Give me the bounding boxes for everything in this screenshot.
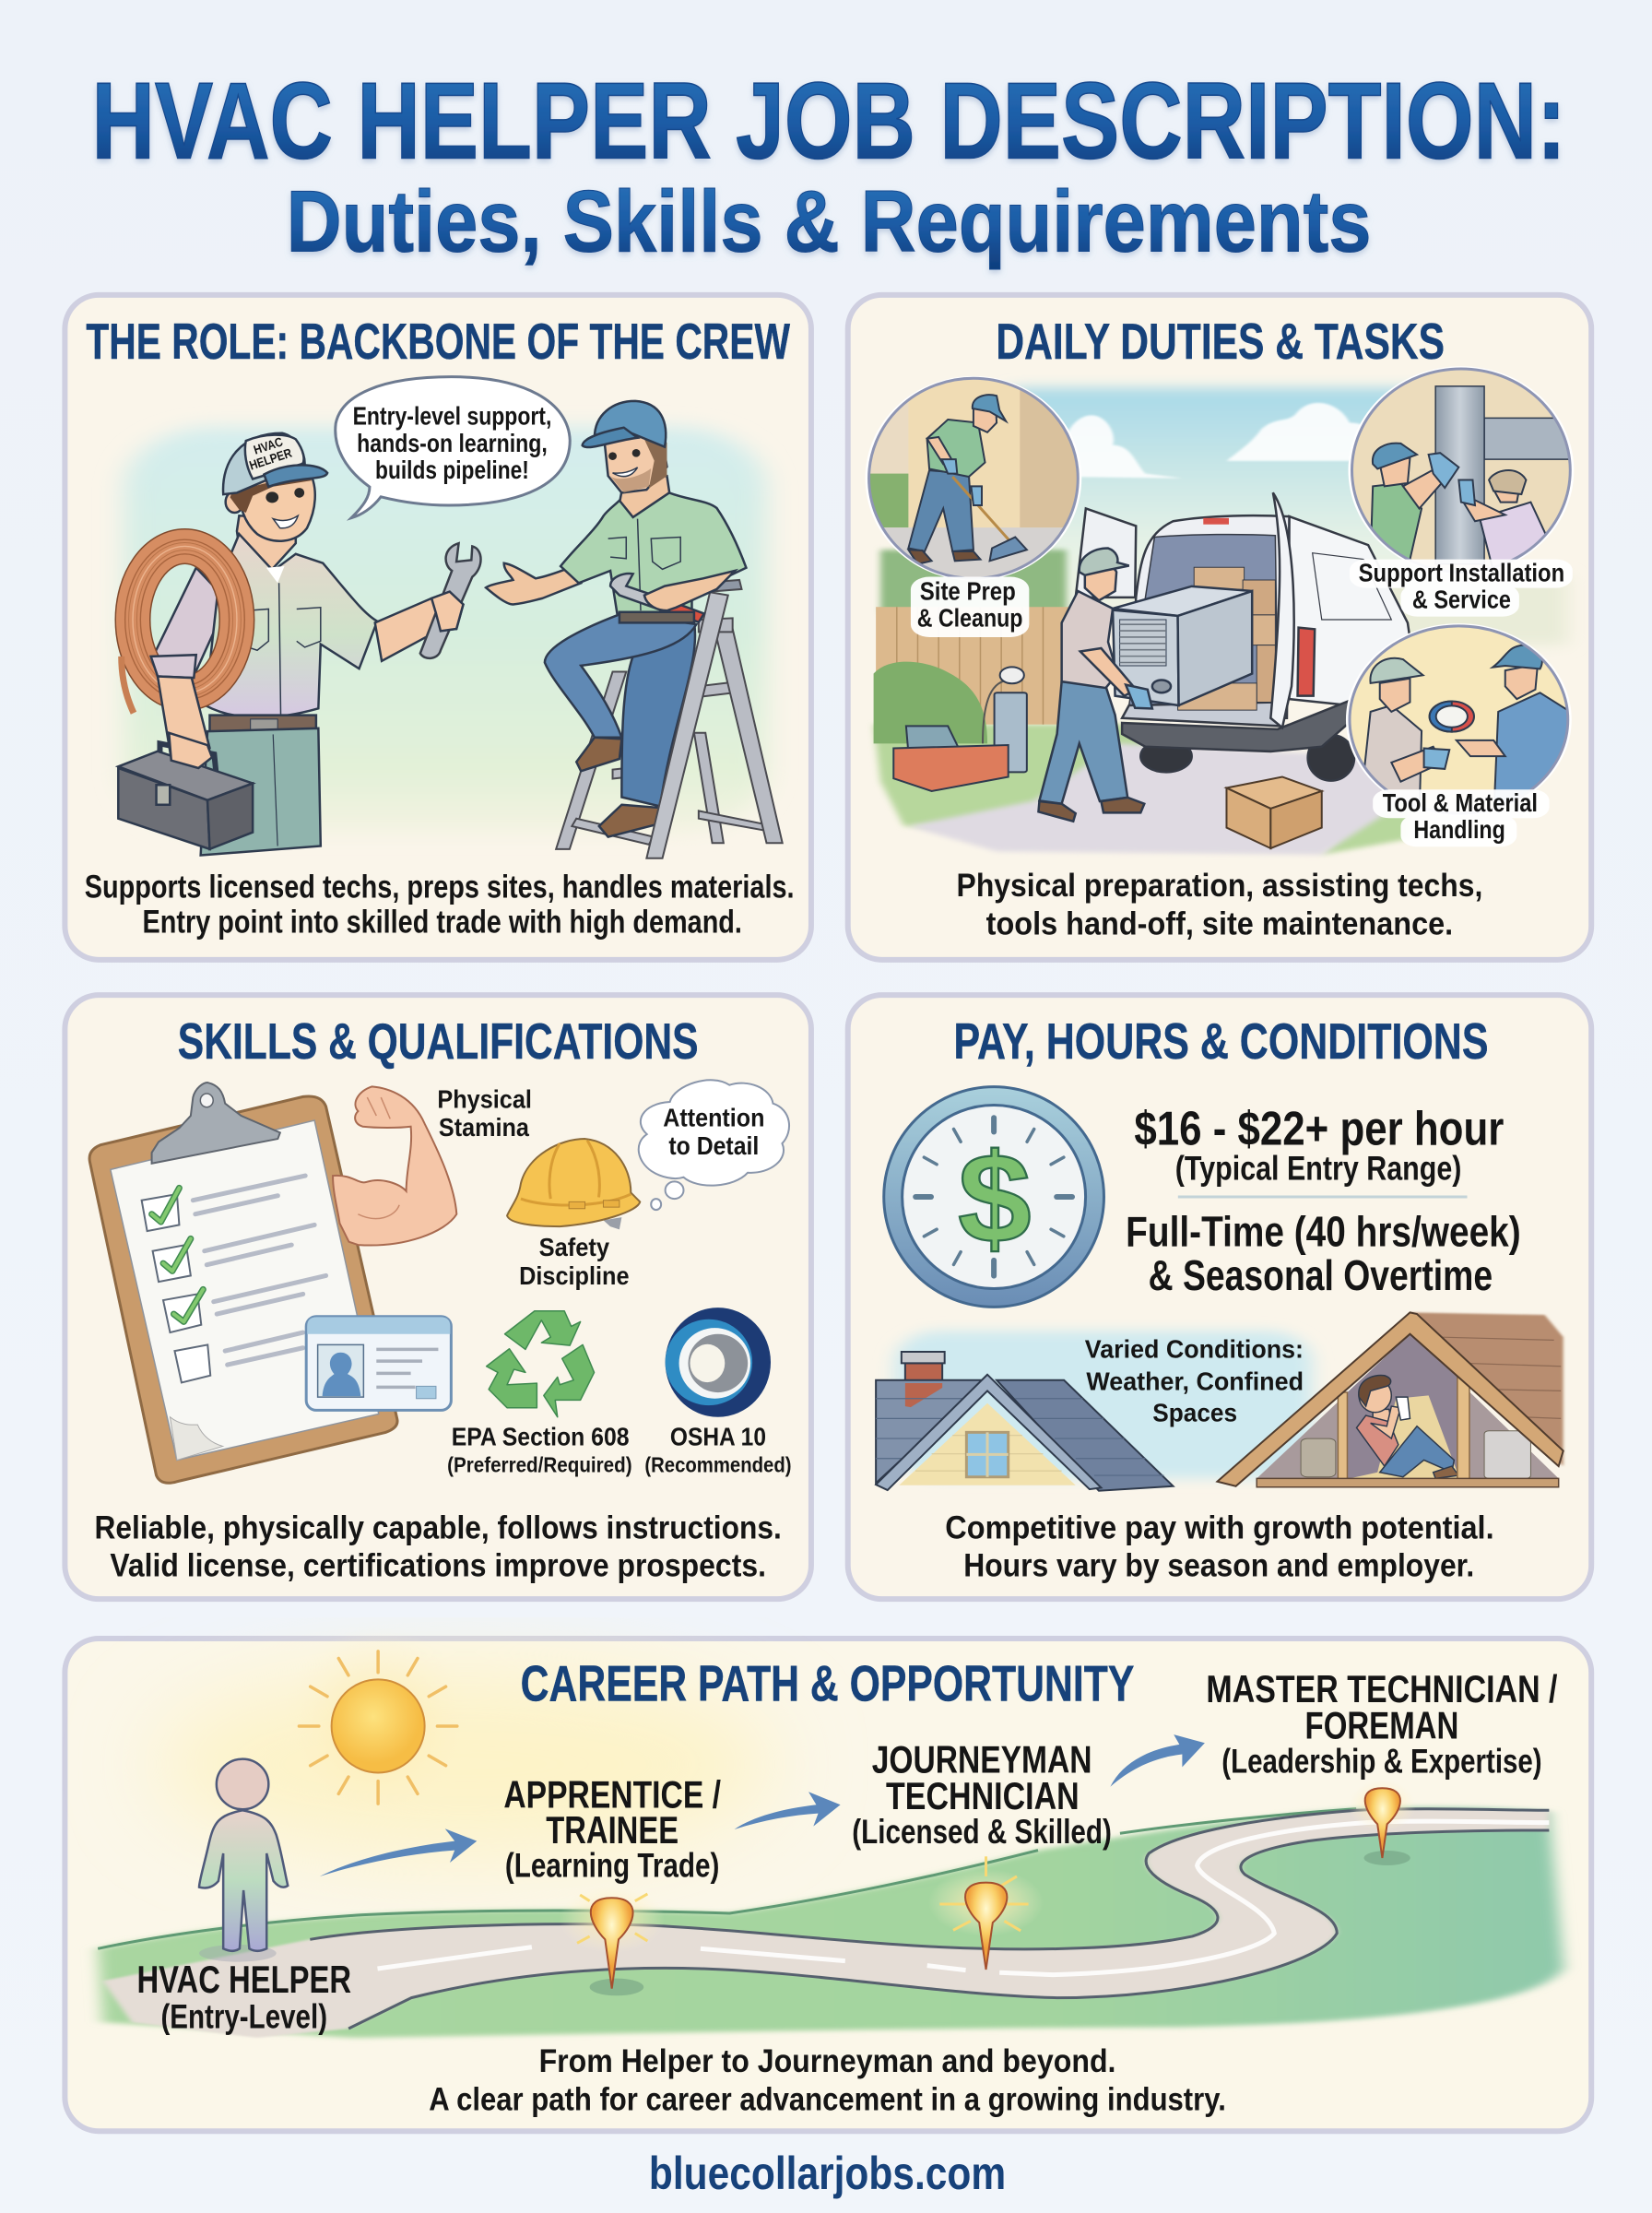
label: hvac helper: (Entry-Level) bbox=[160, 1997, 327, 2035]
hours: & Seasonal Overtime bbox=[1149, 1251, 1493, 1299]
label: attention to detail bbox=[663, 1103, 764, 1160]
label: varied conditions: Spaces bbox=[1152, 1398, 1237, 1426]
icon: recycling arrows bbox=[487, 1311, 595, 1417]
scene: helper and technician bbox=[118, 401, 783, 858]
helper head and arm bbox=[151, 433, 327, 768]
thought cloud bbox=[639, 1080, 789, 1210]
hours: Full-Time (40 hrs/week) bbox=[1126, 1208, 1521, 1256]
heading: the role: THE ROLE: BACKBONE OF THE CREW bbox=[86, 313, 790, 370]
speech bubble: Entry-level support, bbox=[353, 402, 551, 431]
caption: skills: Valid license, certifications improve prospects. bbox=[110, 1548, 766, 1584]
label: master technician bbox=[1206, 1668, 1558, 1780]
heading: skills: SKILLS & QUALIFICATIONS bbox=[178, 1012, 699, 1070]
caption: career path: From Helper to Journeyman and beyond. bbox=[539, 2043, 1115, 2079]
icon: clock with dollar bbox=[884, 1087, 1103, 1307]
footer: website: bluecollarjobs.com bbox=[649, 2147, 1006, 2199]
copper coil bbox=[122, 539, 244, 713]
icon: clipboard checklist bbox=[89, 1083, 397, 1483]
caption: daily duties: Physical preparation, assisting techs, bbox=[957, 868, 1482, 904]
label: safety discipline: Discipline bbox=[519, 1261, 630, 1290]
label: epa section 608 bbox=[447, 1422, 632, 1476]
technician legs bbox=[545, 613, 696, 837]
icon: id card bbox=[306, 1317, 451, 1410]
road lower edge bbox=[348, 1830, 1549, 2029]
title: Duties, Skills & Requirements bbox=[287, 172, 1371, 270]
icon: osha logo bbox=[666, 1308, 771, 1417]
caption: pay: Competitive pay with growth potential. bbox=[945, 1509, 1494, 1545]
label: attention to detail: Attention bbox=[663, 1103, 764, 1131]
label: site prep: Site Prep bbox=[920, 577, 1016, 606]
house bbox=[876, 1352, 1174, 1491]
pin: master bbox=[1349, 1780, 1416, 1865]
heading: career path: CAREER PATH & OPPORTUNITY bbox=[521, 1654, 1134, 1711]
caption: the role bbox=[85, 869, 795, 941]
road edges bbox=[310, 1809, 1549, 1949]
circle: tool handling bbox=[1345, 622, 1573, 820]
label: journeyman: JOURNEYMAN bbox=[872, 1738, 1092, 1781]
pay range: $16 - $22+ per hour bbox=[1134, 1102, 1504, 1155]
label: apprentice: (Learning Trade) bbox=[505, 1847, 719, 1885]
label: apprentice bbox=[503, 1774, 721, 1885]
scene: van unloading bbox=[866, 366, 1574, 855]
cardboard box bbox=[1226, 776, 1322, 848]
label: site prep: & Cleanup bbox=[917, 604, 1022, 633]
hand bbox=[431, 592, 463, 631]
label: varied conditions: Weather, Confined bbox=[1086, 1367, 1304, 1396]
label: journeyman bbox=[852, 1738, 1112, 1851]
ladder bbox=[556, 618, 783, 849]
label: physical stamina: Stamina bbox=[439, 1113, 529, 1142]
attic bbox=[1410, 1312, 1564, 1466]
label: osha 10 bbox=[644, 1422, 792, 1476]
heading: daily duties: DAILY DUTIES & TASKS bbox=[996, 313, 1445, 370]
skills illustrations bbox=[89, 1080, 789, 1483]
ground bbox=[874, 725, 1145, 829]
pin: journeyman bbox=[928, 1856, 1044, 1970]
caption: the role: Supports licensed techs, preps sites, handles materials. bbox=[85, 869, 795, 905]
panel: skills bbox=[65, 995, 811, 1599]
circle: site prep bbox=[866, 375, 1085, 582]
caption: skills bbox=[95, 1509, 782, 1584]
label: varied conditions: Varied Conditions: bbox=[1085, 1334, 1304, 1363]
red toolbox and gas cylinder bbox=[893, 667, 1027, 791]
caption: the role: Entry point into skilled trade with high demand. bbox=[143, 905, 742, 941]
van bbox=[1076, 492, 1417, 781]
scene: house and attic bbox=[876, 1312, 1564, 1491]
label: hvac helper bbox=[136, 1959, 351, 2035]
speech bubble: builds pipeline! bbox=[375, 456, 529, 484]
label: safety discipline bbox=[519, 1233, 630, 1290]
caption: daily duties bbox=[957, 868, 1482, 941]
caption: career path: A clear path for career advancement in a growing industry. bbox=[429, 2081, 1226, 2117]
front ladder rail bbox=[646, 592, 728, 858]
icon: sun bbox=[279, 1627, 477, 1825]
label: support installation: Support Installation bbox=[1359, 559, 1564, 587]
label: apprentice: APPRENTICE / bbox=[503, 1774, 721, 1817]
caption: pay: Hours vary by season and employer. bbox=[963, 1548, 1474, 1584]
icon: flexed arm bbox=[333, 1086, 456, 1245]
icon: clock with dollar: $ bbox=[958, 1128, 1032, 1270]
label: attention to detail: to Detail bbox=[668, 1131, 759, 1160]
cap label: HVAC bbox=[252, 434, 285, 457]
caption: skills: Reliable, physically capable, follows instructions. bbox=[95, 1509, 782, 1545]
label: varied conditions bbox=[1085, 1334, 1304, 1426]
label: journeyman: TECHNICIAN bbox=[886, 1775, 1080, 1817]
label: safety discipline: Safety bbox=[539, 1233, 610, 1261]
helper body bbox=[148, 515, 463, 855]
speech bubble: hands-on learning, bbox=[357, 429, 548, 457]
label: epa section 608: (Preferred/Required) bbox=[447, 1452, 632, 1476]
panel: the role bbox=[65, 295, 811, 960]
panel: daily duties bbox=[848, 295, 1591, 960]
label: site prep bbox=[917, 577, 1022, 633]
label: master technician: FOREMAN bbox=[1305, 1705, 1458, 1747]
fence bbox=[876, 607, 1071, 725]
label: physical stamina: Physical bbox=[437, 1085, 532, 1114]
technician torso and arm bbox=[486, 401, 746, 622]
label: master technician: MASTER TECHNICIAN / bbox=[1206, 1668, 1558, 1710]
label: support installation bbox=[1359, 559, 1564, 614]
hill outline bbox=[98, 1809, 1356, 1948]
hill bbox=[98, 1807, 1564, 2038]
label: physical stamina bbox=[437, 1085, 532, 1142]
circle: support installation bbox=[1348, 366, 1574, 574]
road landscape bbox=[98, 1759, 1564, 2038]
label: osha 10: OSHA 10 bbox=[670, 1422, 766, 1450]
label backgrounds bbox=[911, 560, 1573, 846]
toolbox bbox=[118, 733, 253, 849]
arrow: apprentice to journeyman bbox=[735, 1792, 841, 1829]
caption: pay bbox=[945, 1509, 1494, 1584]
road centre line bbox=[378, 1821, 1549, 1975]
speech bubble bbox=[336, 377, 570, 518]
wrench bbox=[420, 543, 481, 658]
icon: hard hat bbox=[507, 1139, 640, 1229]
label: tool handling: Tool & Material bbox=[1383, 788, 1538, 817]
label: tool handling: Handling bbox=[1413, 815, 1505, 844]
label: hvac helper: HVAC HELPER bbox=[136, 1959, 351, 2001]
pin: apprentice bbox=[559, 1886, 665, 1995]
road surface bbox=[102, 1809, 1549, 2038]
pay range bbox=[1134, 1102, 1504, 1188]
worker with unit bbox=[1038, 549, 1252, 822]
heading: pay hours: PAY, HOURS & CONDITIONS bbox=[953, 1012, 1488, 1070]
label: osha 10: (Recommended) bbox=[644, 1452, 792, 1476]
label: apprentice: TRAINEE bbox=[546, 1809, 678, 1852]
caption: daily duties: tools hand-off, site maintenance. bbox=[986, 905, 1453, 941]
label: support installation: & Service bbox=[1412, 586, 1511, 614]
label: tool handling bbox=[1383, 788, 1538, 844]
pay range: (Typical Entry Range) bbox=[1175, 1150, 1461, 1188]
person figure bbox=[199, 1759, 288, 1962]
panel: pay hours conditions bbox=[848, 995, 1591, 1599]
cap label line two: HELPER bbox=[247, 445, 293, 473]
title bbox=[91, 59, 1566, 270]
arrow: helper to apprentice bbox=[320, 1828, 477, 1876]
arrow: journeyman to master bbox=[1110, 1734, 1205, 1787]
label: epa section 608: EPA Section 608 bbox=[452, 1422, 630, 1450]
panel: career path bbox=[65, 1627, 1591, 2131]
label: master technician: (Leadership & Expertise) bbox=[1221, 1742, 1542, 1780]
hours bbox=[1126, 1208, 1521, 1299]
label: journeyman: (Licensed & Skilled) bbox=[852, 1813, 1112, 1851]
caption: career path bbox=[429, 2043, 1226, 2117]
